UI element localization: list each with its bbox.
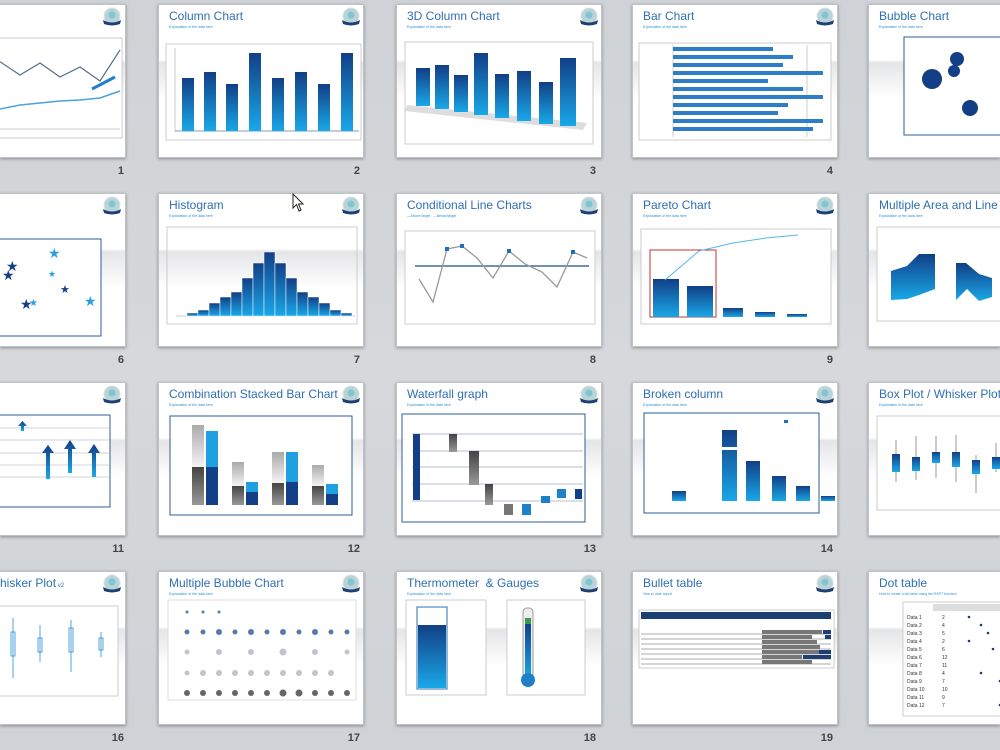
slide 20: dot table: Data 4	[907, 639, 922, 645]
slide 6: star scatter: ★	[48, 269, 56, 279]
slide 20: dot table: 12	[942, 655, 948, 661]
slide 12: combination stacked bar	[158, 382, 364, 536]
slide 9: pareto chart	[632, 193, 838, 347]
text: 8	[590, 354, 596, 366]
slide 6: star scatter: ★	[2, 267, 15, 283]
slide 20: dot table: Data 7	[907, 663, 922, 669]
slide 20: dot table: Data 5	[907, 647, 922, 653]
slide 4: bar chart: Bar Chart	[643, 9, 694, 23]
text: 19	[821, 732, 833, 744]
slide 3: 3D column chart	[396, 4, 602, 158]
slide 9: pareto chart: Explanation of the data here	[643, 214, 687, 218]
slide 17: multiple bubble: Multiple Bubble Chart	[169, 576, 284, 590]
slide 12: combination stacked bar: Combination Stacked Bar Chart	[169, 387, 338, 401]
text: 14	[821, 543, 833, 555]
slide 10: multiple area	[868, 193, 1000, 347]
slide 14: broken column	[632, 382, 838, 536]
slide 18: thermometer & gauges: Explanation of the data here	[407, 592, 451, 596]
slide 7: histogram: Histogram	[169, 198, 224, 212]
slide 6: star scatter: ★	[48, 245, 61, 261]
slide 5: bubble chart: Explanation of the data here	[879, 25, 923, 29]
slide 4: bar chart	[632, 4, 838, 158]
text: 7	[354, 354, 360, 366]
slide 4: bar chart: Explanation of the data here	[643, 25, 687, 29]
slide 20: dot table: 2	[942, 639, 945, 645]
slide 7: histogram: Explanation of the data here	[169, 214, 213, 218]
slide 17: multiple bubble: Explanation of the data here	[169, 592, 213, 596]
slide 14: broken column: Explanation of the data here	[643, 403, 687, 407]
slide 20: dot table: 11	[942, 663, 947, 669]
slide 5: bubble chart	[868, 4, 1000, 158]
slide 6: star scatter: ★	[6, 258, 19, 274]
slide 20: dot table: Data 10	[907, 687, 925, 693]
slide 20: dot table: 4	[942, 623, 945, 629]
slide 19: bullet table	[632, 571, 838, 725]
slide 17: multiple bubble	[158, 571, 364, 725]
slide 9: pareto chart: Pareto Chart	[643, 198, 711, 212]
slide 20: dot table: Data 11	[907, 695, 924, 701]
slide 3: 3D column chart: Explanation of the data here	[407, 25, 451, 29]
slide 6: star scatter: ★	[60, 284, 70, 296]
slide 5: bubble chart: Bubble Chart	[879, 9, 949, 23]
slide 13: waterfall: Waterfall graph	[407, 387, 488, 401]
slide 20: dot table: 2	[942, 615, 945, 621]
slide 20: dot table: 7	[942, 679, 945, 685]
slide 20: dot table: 10	[942, 687, 948, 693]
slide 6: star scatter: ★	[84, 293, 97, 309]
slide 20: dot table: 4	[942, 671, 945, 677]
slide 18: thermometer & gauges: Thermometer & Gauges	[407, 576, 539, 590]
slide 15: box plot: Explanation of the data here	[879, 403, 923, 407]
text: 4	[827, 165, 833, 177]
text: 1	[118, 165, 124, 177]
mouse cursor	[292, 193, 304, 212]
slide 15: box plot: Box Plot / Whisker Plot	[879, 387, 1000, 401]
slide 20: dot table: Data 1	[907, 615, 922, 621]
text: 17	[348, 732, 360, 744]
slide 20: dot table: How to create a dot table using the REPT function	[879, 592, 957, 596]
slide 6: star scatter: ★	[29, 298, 38, 309]
slide 3: 3D column chart: 3D Column Chart	[407, 9, 500, 23]
slide 20: dot table: Data 6	[907, 655, 922, 661]
slide 20: dot table: 5	[942, 631, 945, 637]
slide 20: dot table: Data 8	[907, 671, 922, 677]
slide 1: line chart	[0, 4, 126, 158]
slide 2: column chart	[158, 4, 364, 158]
slide 11: arrows chart	[0, 382, 126, 536]
slide 20: dot table	[868, 571, 1000, 725]
slide 20: dot table: 9	[942, 695, 945, 701]
text: 18	[584, 732, 596, 744]
text: 6	[118, 354, 124, 366]
slide 19: bullet table: Year to date report	[643, 592, 672, 596]
slide 20: dot table: Data 3	[907, 631, 922, 637]
slide 20: dot table: 6	[942, 647, 945, 653]
slide 20: dot table: Data 2	[907, 623, 922, 629]
slide 7: histogram	[158, 193, 364, 347]
slide 18: thermometer & gauges	[396, 571, 602, 725]
slide 20: dot table: Dot table	[879, 576, 927, 590]
slide 20: dot table: Data 9	[907, 679, 922, 685]
slide 8: conditional line charts: Conditional Line Charts	[407, 198, 532, 212]
title: Column Chart	[169, 9, 243, 23]
slide 16: whisker plot v2	[0, 571, 126, 725]
text: 16	[112, 732, 124, 744]
slide 15: box plot	[868, 382, 1000, 536]
slide 14: broken column: Broken column	[643, 387, 723, 401]
slide 6: star scatter	[0, 193, 126, 347]
slide 13: waterfall: Explanation of the data here	[407, 403, 451, 407]
slide 8: conditional line charts: —Above target —Below target	[407, 214, 456, 218]
slide 16: whisker plot v2: hisker Plot v2	[0, 576, 64, 590]
text: 11	[112, 543, 124, 555]
text: 13	[584, 543, 596, 555]
slide 12: combination stacked bar: Explanation of the data here	[169, 403, 213, 407]
slide 10: multiple area: Explanation of the data here	[879, 214, 923, 218]
slide 2: column chart: Explanation of the data here	[169, 25, 213, 29]
slide 13: waterfall	[396, 382, 602, 536]
text: 3	[590, 165, 596, 177]
slide 20: dot table: 7	[942, 703, 945, 709]
text: 9	[827, 354, 833, 366]
text: 12	[348, 543, 360, 555]
text: 2	[354, 165, 360, 177]
slide 19: bullet table: Bullet table	[643, 576, 702, 590]
slide 6: star scatter: ★	[20, 296, 33, 312]
slide 8: conditional line charts	[396, 193, 602, 347]
slide 20: dot table: Data 12	[907, 703, 925, 709]
